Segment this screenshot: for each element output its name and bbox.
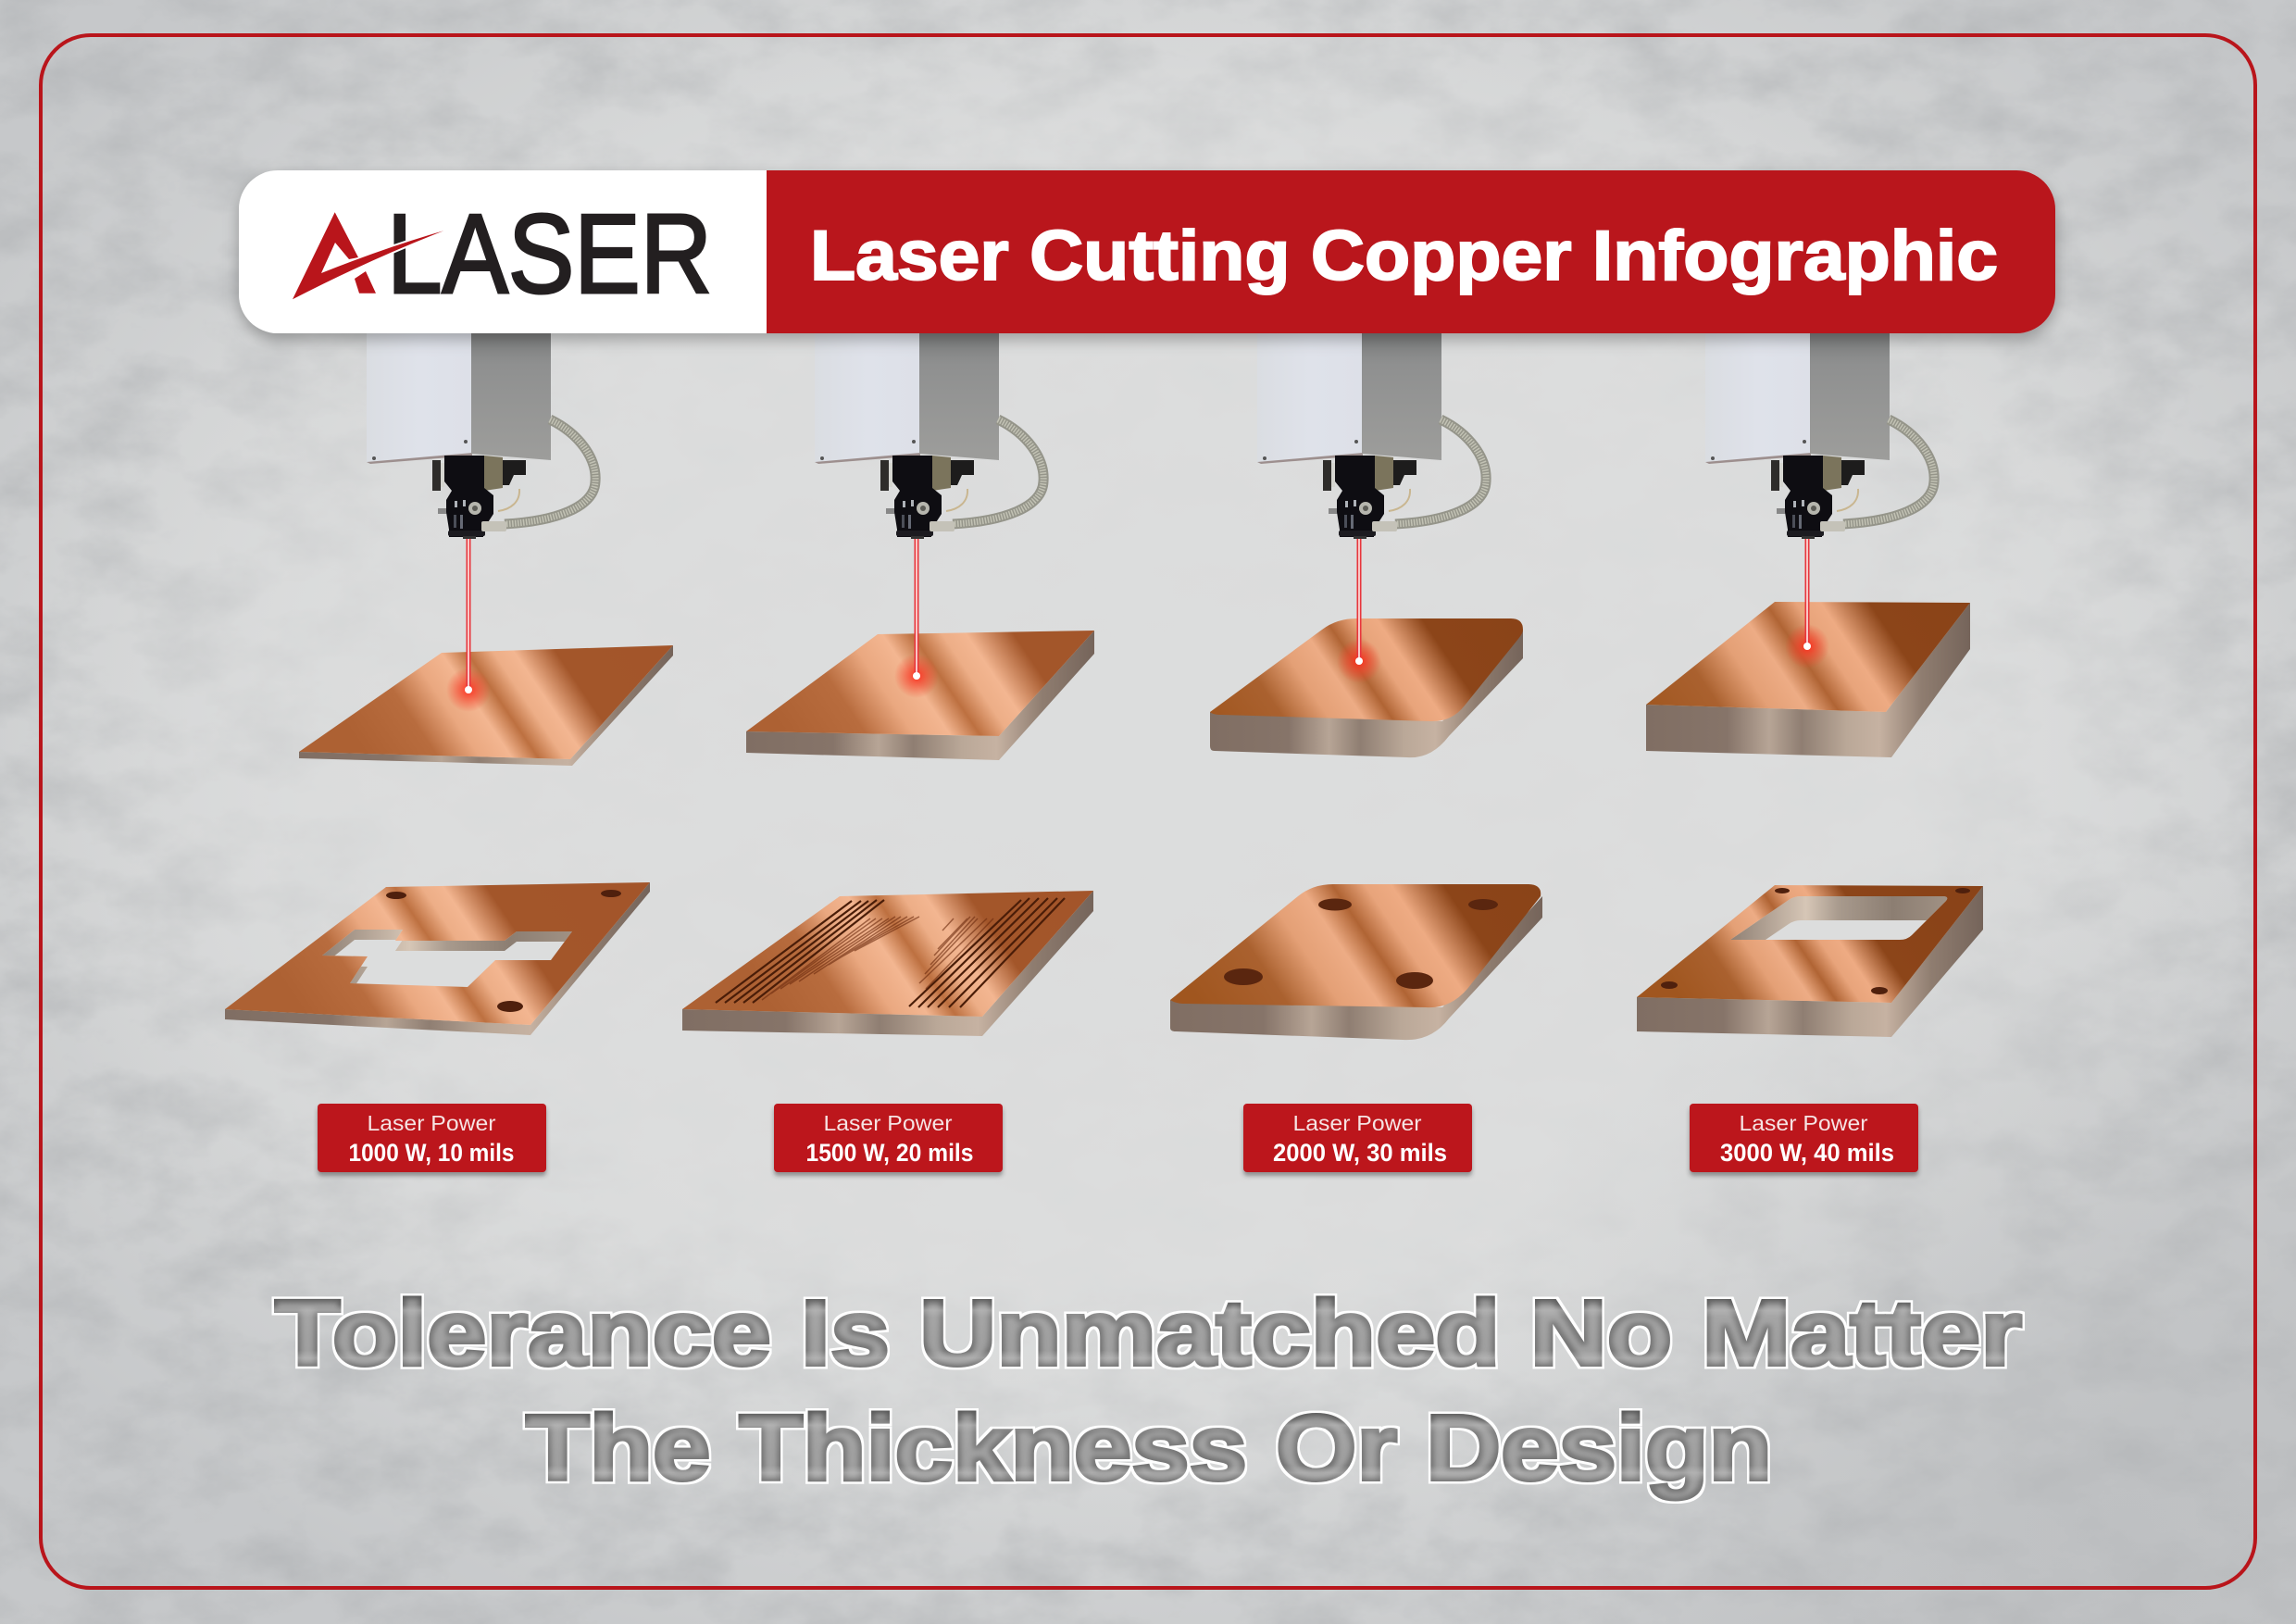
label: 2000 W, 30 mils: Laser Power [1292,1111,1422,1135]
banner background [239,170,2055,333]
label: 1500 W, 20 mils [774,1104,1003,1172]
laser beam 3 [1337,539,1381,683]
copper sheet 1 uncut, 10 mils [299,645,673,766]
label: 1000 W, 10 mils: 1000 W, 10 mils [348,1139,515,1167]
label: 3000 W, 40 mils: Laser Power [1739,1111,1868,1135]
laser beam 4 [1785,539,1829,668]
logo: A LASER: LASER [387,191,712,317]
label: 1000 W, 10 mils: Laser Power [367,1111,496,1135]
bottom headline line 1: Tolerance Is Unmatched No Matter [275,1281,2022,1385]
copper sheet 4 uncut, 40 mils [1646,602,1970,757]
laser beam 2 [894,539,939,698]
label: 1000 W, 10 mils [318,1104,546,1172]
copper sheet 3 uncut, 30 mils [1210,618,1523,757]
cut part 2: sheet with parallel slots [682,891,1093,1036]
title: Laser Cutting Copper Infographic [810,217,1998,295]
laser beam 1 [446,539,491,712]
header banner [239,170,2055,333]
bottom headline line 2: The Thickness Or Design [526,1396,1772,1500]
label: 3000 W, 40 mils [1690,1104,1918,1172]
copper sheet 2 uncut, 20 mils [746,631,1094,760]
laser head 1 [367,333,595,539]
cut part 3: sheet with four holes [1170,884,1542,1040]
label: 1500 W, 20 mils: 1500 W, 20 mils [805,1139,974,1167]
label: 2000 W, 30 mils: 2000 W, 30 mils [1273,1139,1447,1167]
cut part 1: sheet with shaped cut-out [225,882,650,1035]
laser head 2 [815,333,1043,539]
label: 3000 W, 40 mils: 3000 W, 40 mils [1720,1139,1894,1167]
label: 2000 W, 30 mils [1243,1104,1472,1172]
label: 1500 W, 20 mils: Laser Power [824,1111,953,1135]
cut part 4: sheet with rectangular window [1637,885,1983,1037]
laser head 3 [1257,333,1486,539]
laser head 4 [1705,333,1934,539]
logo: A LASER [293,191,712,317]
